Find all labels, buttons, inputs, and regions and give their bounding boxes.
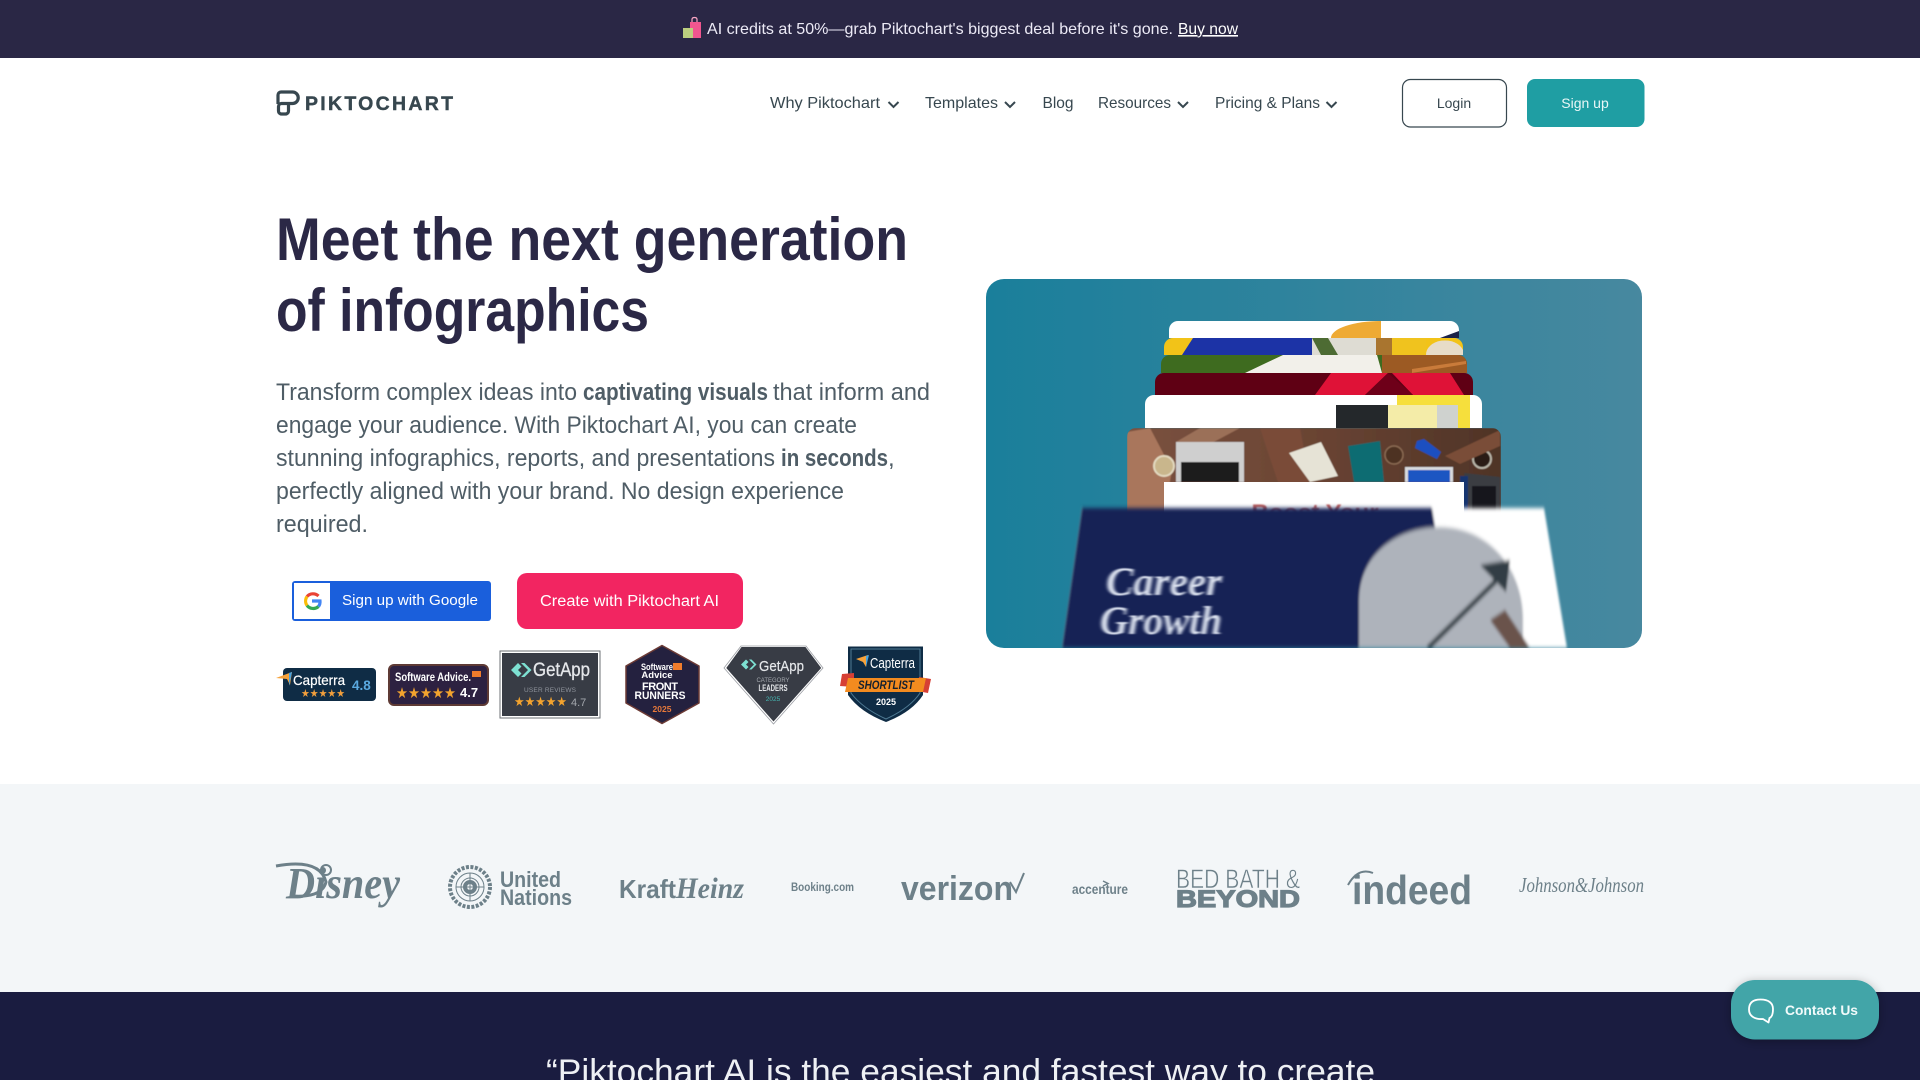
logo: accenture: accenture <box>1072 881 1128 897</box>
badge: software advice 4.7: 4.7 <box>460 685 478 700</box>
promo text: AI credits at 50%—grab Piktochart's biggest deal before it's gone. <box>707 21 1173 38</box>
logo: kraft heinz: Heinz <box>675 872 744 905</box>
badge: getapp category leaders: 2025 <box>766 696 781 703</box>
career growth text: Growth <box>1100 598 1222 643</box>
badge: software advice 4.7 <box>389 665 488 705</box>
card: maroon and red <box>1155 373 1473 395</box>
hero heading: of infographics <box>276 277 649 344</box>
badge: getapp user reviews: USER REVIEWS <box>524 687 577 694</box>
hero paragraph: in seconds <box>781 445 888 472</box>
hero paragraph: stunning infographics, reports, and presentations <box>276 445 775 472</box>
hero paragraph: perfectly aligned with your brand. No design experience <box>276 478 844 505</box>
card: office desk photo <box>1127 428 1501 516</box>
hero paragraph: , <box>888 445 895 472</box>
card: white and yellow <box>1145 395 1482 428</box>
badge: capterra 4.8: 4.8 <box>352 678 371 693</box>
create with piktochart ai button: Create with Piktochart AI <box>540 593 719 610</box>
login button: Login <box>1437 95 1471 111</box>
top promo bar <box>0 0 1920 58</box>
navigation bar <box>278 79 1644 127</box>
icon: getapp mark <box>511 663 532 677</box>
badge: capterra shortlist <box>840 646 931 722</box>
hero paragraph: that inform and <box>773 379 930 406</box>
logo: disney: Disney <box>285 859 400 908</box>
badge: capterra 4.8: Capterra <box>293 672 345 688</box>
testimonial band <box>0 992 1920 1080</box>
create with piktochart ai button <box>517 573 743 629</box>
google sign up button: Sign up with Google <box>342 593 478 609</box>
logo: united nations: United <box>500 867 561 892</box>
client logo band <box>0 784 1920 992</box>
logo wordmark: PIKTOCHART <box>305 93 453 115</box>
nav links: Pricing & Plans <box>1215 95 1320 112</box>
badge: getapp category leaders <box>724 646 823 724</box>
hero image: stacked documents <box>986 279 1642 648</box>
logo: kraft heinz: Kraft <box>619 874 676 904</box>
hero heading <box>276 206 908 344</box>
badge: capterra 4.8 <box>276 668 376 701</box>
badge: software advice front runners: Software <box>641 662 673 673</box>
nav links: Why Piktochart <box>770 95 881 112</box>
nav links: Resources <box>1098 95 1171 112</box>
icon: speech bubble <box>1749 1000 1773 1022</box>
logo: united nations: Nations <box>500 885 572 910</box>
card: career growth <box>1060 508 1570 648</box>
badge: getapp user reviews: ★★★★★ <box>514 695 567 710</box>
badge: software advice front runners: FRONT <box>642 681 678 693</box>
badge: getapp user reviews: GetApp <box>533 660 590 681</box>
badge: capterra shortlist: SHORTLIST <box>858 680 915 692</box>
logo: kraft heinz <box>619 872 744 905</box>
login button <box>1402 80 1506 127</box>
badge: getapp category leaders: LEADERS <box>758 683 788 693</box>
badge: software advice front runners: 2025 <box>653 704 672 714</box>
career growth text: Career <box>1106 559 1222 604</box>
badge: software advice 4.7: Software Advice. <box>395 670 471 684</box>
icon: shopping bags <box>683 18 701 38</box>
hero paragraph: engage your audience. With Piktochart AI, you can create <box>276 412 857 439</box>
logo: bed bath and beyond <box>1176 864 1300 913</box>
nav links <box>770 95 1336 112</box>
badge: capterra 4.8: ★★★★★ <box>301 687 345 700</box>
card: blue and yellow <box>1164 338 1463 355</box>
sign up button: Sign up <box>1561 95 1609 111</box>
logo: indeed: indeed <box>1352 867 1472 913</box>
badge: getapp category leaders: GetApp <box>759 658 804 675</box>
award badges <box>276 646 931 724</box>
card: boost your report <box>1164 482 1464 512</box>
google sign up button <box>292 581 491 621</box>
badge: software advice front runners: RUNNERS <box>634 690 686 702</box>
card: boost your report: Boost Your <box>1251 500 1379 527</box>
nav links: Blog <box>1042 95 1074 112</box>
logo: johnson and johnson: Johnson&Johnson <box>1519 873 1644 897</box>
contact us button: Contact Us <box>1785 1002 1858 1018</box>
sign up button <box>1527 79 1644 127</box>
career growth text <box>1098 568 1225 636</box>
badge: software advice front runners: Advice <box>641 670 673 681</box>
hero paragraph <box>276 379 930 538</box>
card: orange arc <box>1169 321 1459 338</box>
badge: software advice front runners <box>626 646 699 724</box>
badge: software advice 4.7: ★★★★★ <box>396 684 456 702</box>
icon: getapp mark <box>741 660 756 670</box>
logo: united nations <box>450 867 572 910</box>
icon: piktochart mark <box>278 92 298 114</box>
badge: capterra shortlist: Capterra <box>870 656 916 672</box>
nav links: Templates <box>925 95 998 112</box>
badge: getapp user reviews <box>500 651 600 718</box>
icon: google g <box>306 594 320 608</box>
contact us button <box>1731 980 1879 1040</box>
hero paragraph: Transform complex ideas into <box>276 379 577 406</box>
logo: booking.com: Booking.com <box>791 880 854 894</box>
logo <box>278 92 453 115</box>
badge: getapp user reviews: 4.7 <box>571 697 586 709</box>
hero heading: Meet the next generation <box>276 206 908 273</box>
logo: bed bath and beyond: BEYOND <box>1176 886 1300 913</box>
hero paragraph: captivating visuals <box>583 379 768 406</box>
logo: bed bath and beyond: BED BATH & <box>1176 864 1300 894</box>
badge: capterra shortlist: 2025 <box>876 697 896 707</box>
promo link: Buy now <box>1178 21 1238 38</box>
badge: getapp category leaders: CATEGORY <box>756 678 790 684</box>
icon: un globe <box>450 867 490 907</box>
card: green and orange <box>1161 355 1467 373</box>
logo: verizon: verizon <box>901 870 1013 908</box>
hero paragraph: required. <box>276 511 368 538</box>
